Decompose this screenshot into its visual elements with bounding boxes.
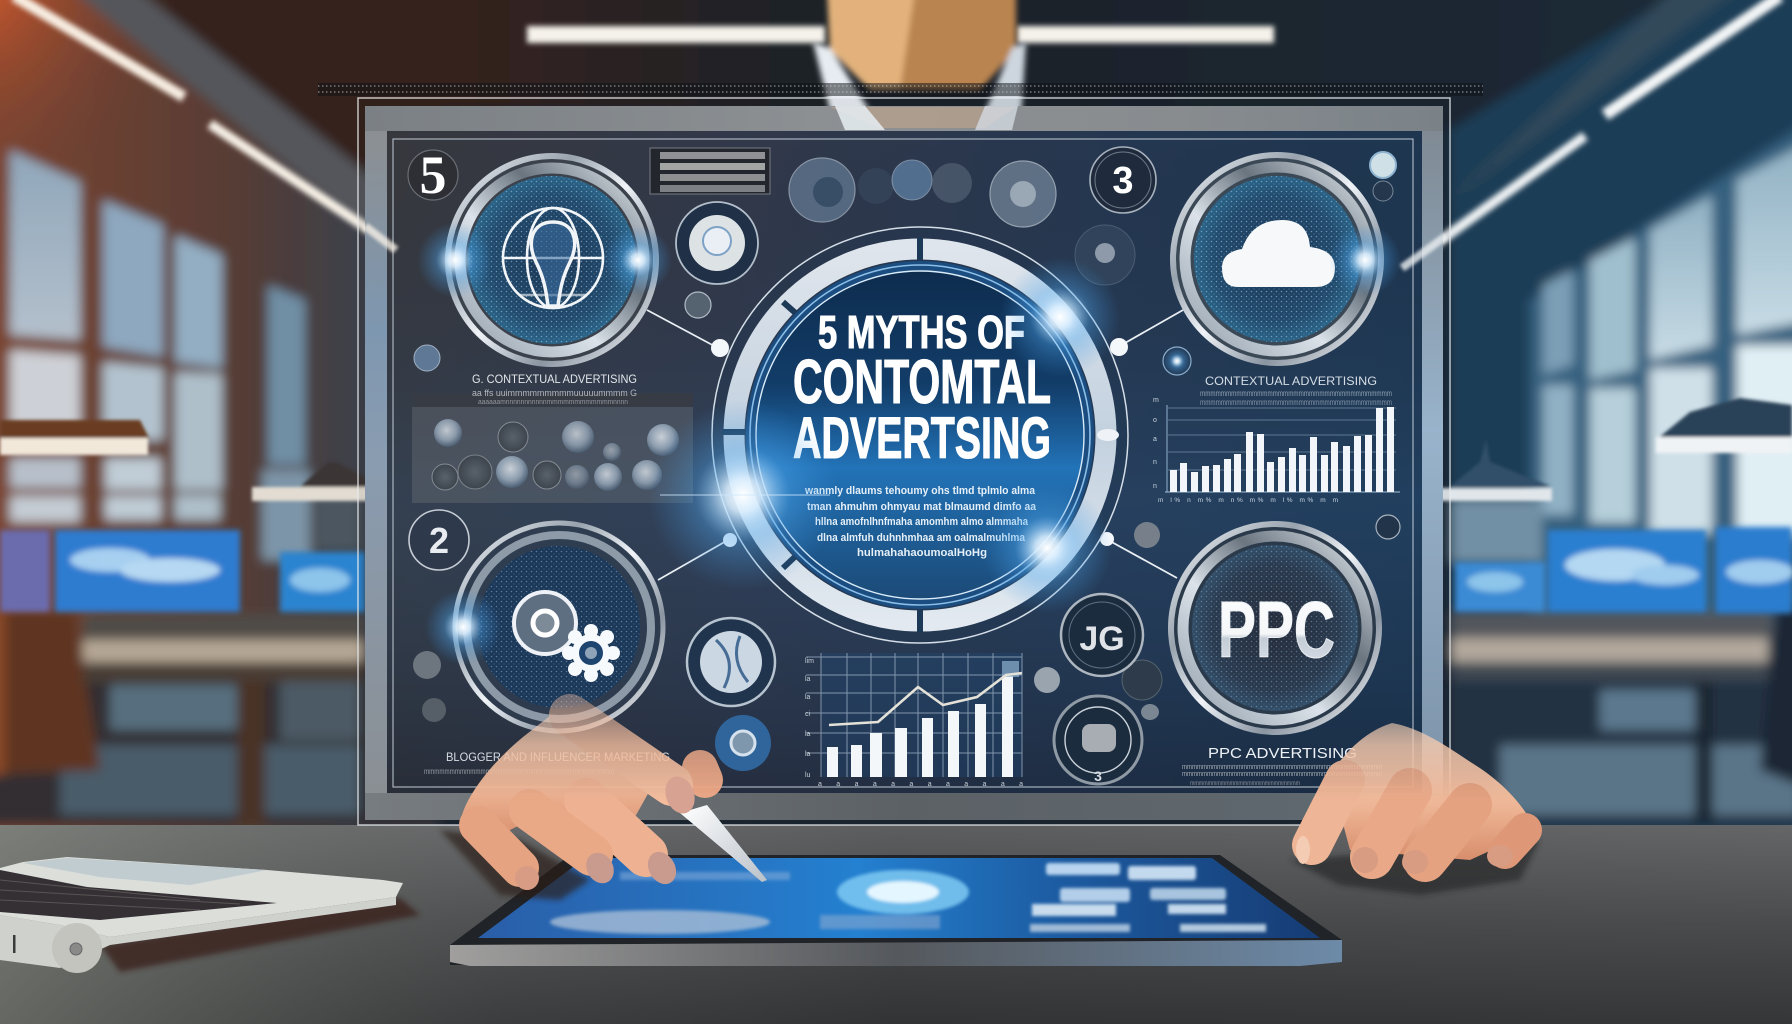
background person: neck and shirt <box>813 0 1026 135</box>
ceiling lights <box>14 0 1780 270</box>
icon: blue lens disc <box>715 715 771 771</box>
chart: bar chart top right <box>1153 397 1400 504</box>
chart: bar and line chart bottom center <box>805 653 1023 788</box>
icon: left hand with stylus <box>440 708 767 900</box>
hanging lamps <box>0 398 1792 501</box>
text block: contextual label: aa ffs uuimmmmmmmmmuuuuummmm G <box>472 388 637 398</box>
icon: number 5 badge: 5 <box>420 145 446 205</box>
text block: bottom left label <box>424 750 670 776</box>
text block: hub description: hulmahahaoumoalHoHg <box>857 547 987 559</box>
text block: top right chart label: mmmmmmmmmmmmmmmmmmmmmmmmmmmmmmmmmmmmm <box>1200 398 1392 407</box>
icon: cloud badge (top right) <box>1173 155 1381 363</box>
icon: PPC badge (bottom right) <box>1171 524 1379 732</box>
chart: bar chart top right: n <box>1153 483 1157 490</box>
text block: contextual label <box>472 372 637 406</box>
icon: number 2 badge <box>409 510 469 570</box>
icon: bottom ring badge <box>1054 696 1142 784</box>
text block: PPC advertising label: mmmmmmmmmmmmmmmmmmmmmmmmmmmmmmmmmmmmmmmm <box>1182 764 1382 771</box>
text block: PPC advertising label: PPC ADVERTISING <box>1208 745 1357 762</box>
text block: hub description: hllna amofnlhnfmaha amomhm almo almmaha <box>815 516 1029 528</box>
text block: top right chart label <box>1200 374 1392 407</box>
icons: small side bubbles <box>413 152 1400 722</box>
icons: top row bubbles <box>789 158 1056 227</box>
text block: bottom left label: BLOGGER AND INFLUENCER MARKETING <box>446 750 670 764</box>
chart: bar chart top right: o <box>1153 417 1157 424</box>
chart: bar chart top right: n <box>1153 459 1157 466</box>
monitors <box>0 527 1792 613</box>
panel: icon tray with bubbles <box>412 393 693 503</box>
chart: bar and line chart bottom center: lim <box>805 658 814 665</box>
text block: top right chart label: mmmmmmmmmmmmmmmmmmmmmmmmmmmmmmmmmmmmm <box>1200 389 1392 398</box>
connector lines and nodes <box>647 310 1183 580</box>
icon: number 5 badge <box>408 145 458 205</box>
title: ADVERTSING <box>793 406 1051 471</box>
icon: JG badge <box>1061 594 1143 676</box>
text block: bottom left label: mmmmmmmmmmmmmmmmmmmmmmmmmmmmmmmmmmmmm <box>424 767 614 776</box>
chart: bar and line chart bottom center: la <box>805 694 811 701</box>
title: CONTOMTAL <box>793 348 1051 417</box>
dithered strip above frame <box>318 83 1483 96</box>
icon: number 3 badge: 3 <box>1112 160 1134 202</box>
chart: bar and line chart bottom center: lu <box>805 772 811 779</box>
text block: hub description <box>804 485 1037 559</box>
text block: hub description: dlna almfuh duhnhmhaa am oalmalmuhlma <box>817 532 1026 544</box>
text block: PPC advertising label <box>1182 745 1382 787</box>
text block: contextual label: aaaaaamnnnnnnnnnnnmmmmmmmmmmmmnnnn <box>478 399 628 406</box>
icon: PPC badge (bottom right): PPC <box>1218 585 1335 674</box>
icon: laptop <box>0 857 420 973</box>
icon: bottom ring badge: 3 <box>1094 768 1102 784</box>
text block: contextual label: G. CONTEXTUAL ADVERTISING <box>472 372 637 386</box>
text block: hub description: tman ahmuhm ohmyau mat blmaumd dimfo aa <box>807 501 1037 513</box>
chart: bar and line chart bottom center: ci <box>805 711 810 718</box>
icon: white button disc <box>676 202 758 284</box>
icon: camera and gear badge (bottom left) <box>455 523 663 731</box>
text block: top right chart label: CONTEXTUAL ADVERTISING <box>1205 374 1377 388</box>
icon: main hub ring <box>712 227 1128 643</box>
icon: globe badge (top left) <box>448 156 656 364</box>
text block: PPC advertising label: mmmmmmmmmmmmmmmmmmmmmmmmmmmmmmmmmmmmmmmm <box>1182 771 1382 778</box>
chart: bar and line chart bottom center: la <box>805 751 811 758</box>
chart: bar chart top right: m l% n m% m n% m% m l% m% m m <box>1158 497 1338 504</box>
chart: bar and line chart bottom center: la <box>805 676 811 683</box>
table top <box>0 825 1792 1024</box>
chart: bar chart top right: m <box>1153 397 1159 404</box>
icon: JG badge: JG <box>1079 620 1125 658</box>
icon: tablet <box>450 855 1342 966</box>
chart: bar and line chart bottom center: la <box>805 731 811 738</box>
chart: bar chart top right: a <box>1153 436 1157 443</box>
icon: right hand <box>1290 723 1540 895</box>
icon: lens flares <box>417 222 1401 665</box>
icon: number 3 badge <box>1090 147 1156 213</box>
text block: PPC advertising label: mmmmmmmmmmmmmmmmmmmmmmmmm <box>1190 781 1300 787</box>
title <box>793 306 1051 471</box>
icon: striped legend box <box>650 148 770 194</box>
chart: bar and line chart bottom center: a a a a a a a a a a a a <box>818 781 1023 788</box>
icon: number 2 badge: 2 <box>429 520 449 561</box>
panel: glass display frame <box>358 98 1450 825</box>
icon: photo ring disc <box>687 618 775 706</box>
text block: hub description: wanmly dlaums tehoumy ohs tlmd tplmlo alma <box>804 485 1036 497</box>
title: 5 MYTHS OF <box>818 306 1025 358</box>
